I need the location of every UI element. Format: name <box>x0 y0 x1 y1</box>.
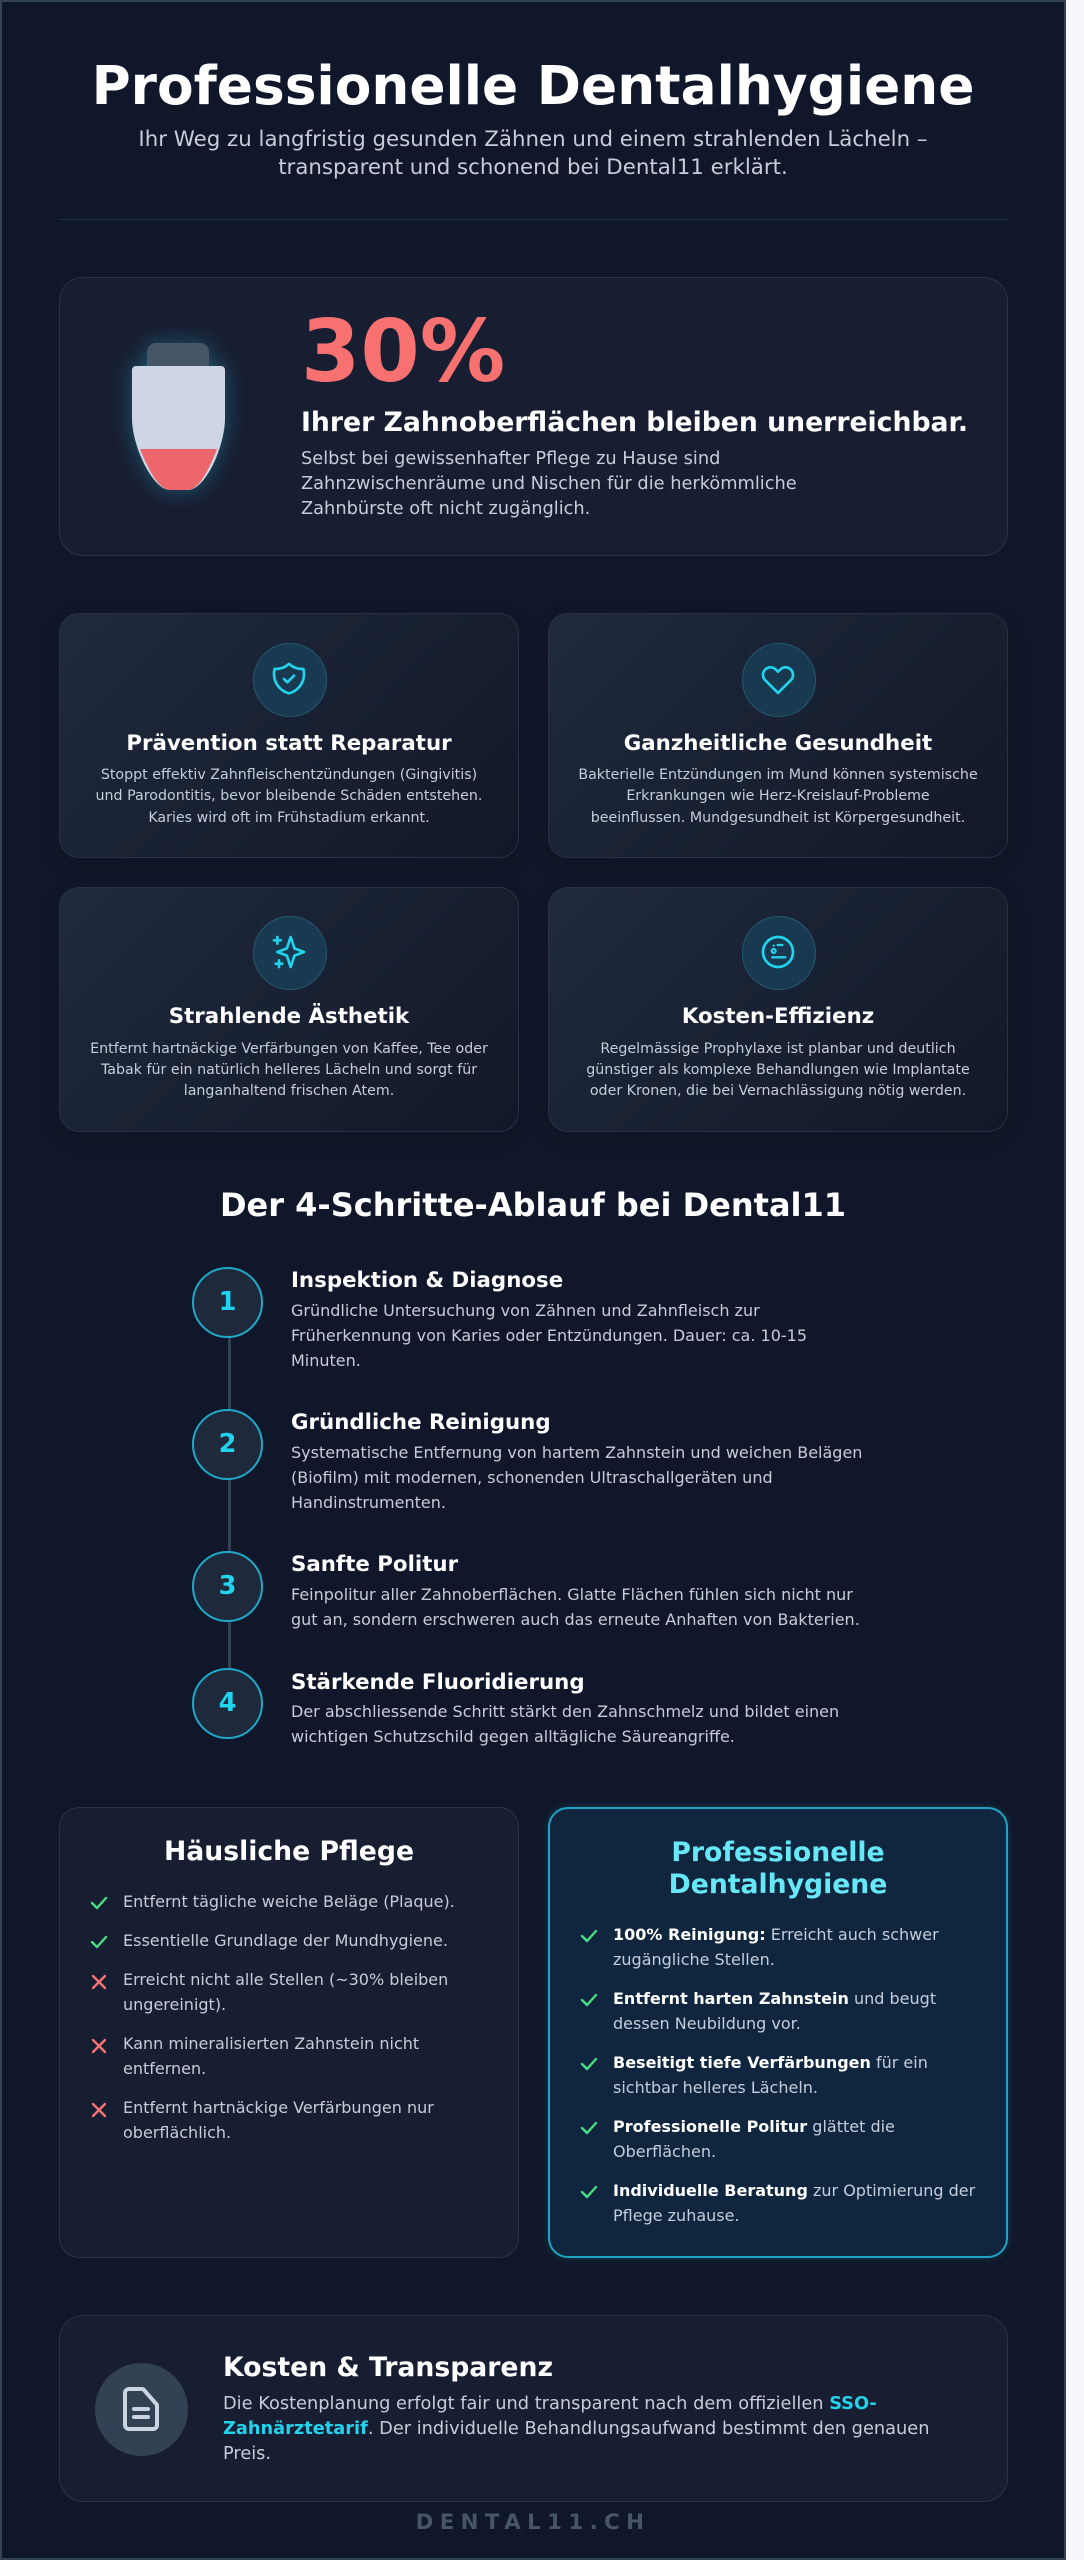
panel: Häusliche Pflege <box>59 1807 519 2258</box>
step text <box>291 1702 839 1746</box>
step number <box>192 1409 263 1480</box>
statistic description: Zahnbürste oft nicht zugänglich. <box>301 498 590 519</box>
card text: und Parodontitis, bevor bleibende Schäden entstehen. <box>96 788 482 804</box>
check item: Oberflächen. <box>613 2142 716 2161</box>
panel: Strahlende Ästhetik <box>59 887 519 1132</box>
step heading: Inspektion & Diagnose <box>291 1268 563 1293</box>
step 1 <box>192 1267 807 1370</box>
icon: document <box>95 2363 188 2456</box>
icon: sparkles <box>253 916 327 990</box>
card text: Entfernt hartnäckige Verfärbungen von Kaffee, Tee oder <box>90 1040 488 1056</box>
panel: Prävention statt Reparatur <box>59 613 519 858</box>
subtitle: Ihr Weg zu langfristig gesunden Zähnen und einem strahlenden Lächeln – <box>138 127 928 152</box>
cross item: ungereinigt). <box>123 1995 226 2014</box>
card text <box>96 767 482 826</box>
card text: günstiger als komplexe Behandlungen wie Implantate <box>586 1062 970 1078</box>
panel text: Preis. <box>223 2443 271 2464</box>
cross item <box>92 2034 419 2078</box>
check item: sichtbar helleres Lächeln. <box>613 2078 818 2097</box>
step number: 2 <box>219 1429 236 1459</box>
step heading: Gründliche Reinigung <box>291 1410 551 1435</box>
panel heading: Dentalhygiene <box>669 1869 887 1900</box>
step text: Der abschliessende Schritt stärkt den Zahnschmelz und bildet einen <box>291 1702 839 1721</box>
check item: Pflege zuhause. <box>613 2206 740 2225</box>
card text: Stoppt effektiv Zahnfleischentzündungen (Gingivitis) <box>101 767 477 783</box>
card text: Erkrankungen wie Herz-Kreislauf-Probleme <box>626 788 930 804</box>
card heading: Prävention statt Reparatur <box>126 731 452 756</box>
panel heading <box>669 1837 887 1900</box>
step text <box>291 1301 807 1370</box>
step text: Feinpolitur aller Zahnoberflächen. Glatte Flächen fühlen sich nicht nur <box>291 1585 853 1604</box>
step heading: Stärkende Fluoridierung <box>291 1670 585 1695</box>
card text: Tabak für ein natürlich helleres Lächeln und sorgt für <box>101 1062 477 1078</box>
card text: Regelmässige Prophylaxe ist planbar und deutlich <box>600 1040 956 1056</box>
card text: Karies wird oft im Frühstadium erkannt. <box>148 810 430 826</box>
subtitle <box>138 127 928 180</box>
statistic headline: Ihrer Zahnoberflächen bleiben unerreichbar. <box>301 407 968 438</box>
step text: Handinstrumenten. <box>291 1493 446 1512</box>
panel text: Die Kostenplanung erfolgt fair und transparent nach dem offiziellen SSO- <box>223 2393 877 2414</box>
step text: Früherkennung von Karies oder Entzündungen. Dauer: ca. 10-15 <box>291 1326 807 1345</box>
step number: 1 <box>219 1287 236 1317</box>
step 4 <box>192 1668 839 1746</box>
statistic description: Zahnzwischenräume und Nischen für die herkömmliche <box>301 473 797 494</box>
card heading: Ganzheitliche Gesundheit <box>624 731 932 756</box>
panel: Professionelle Dentalhygiene <box>548 1807 1008 2258</box>
card text <box>578 767 978 826</box>
card heading: Strahlende Ästhetik <box>169 1004 409 1029</box>
cross item: entfernen. <box>123 2059 206 2078</box>
check item: 100% Reinigung: Erreicht auch schwer <box>613 1925 939 1944</box>
panel heading: Professionelle <box>671 1837 885 1868</box>
cross item: Entfernt hartnäckige Verfärbungen nur <box>123 2098 434 2117</box>
title: Professionelle Dentalhygiene <box>92 54 974 117</box>
card text <box>586 1040 970 1099</box>
panel text: Zahnärztetarif. Der individuelle Behandlungsaufwand bestimmt den genauen <box>223 2418 929 2439</box>
big percentage: 30% <box>301 303 505 402</box>
step heading: Sanfte Politur <box>291 1552 458 1577</box>
step text: gut an, sondern erschweren auch das erneute Anhaften von Bakterien. <box>291 1610 860 1629</box>
check item: Entfernt harten Zahnstein und beugt <box>613 1989 936 2008</box>
panel text <box>223 2393 929 2464</box>
step number <box>192 1551 263 1622</box>
panel heading: Kosten & Transparenz <box>223 2352 553 2383</box>
check item <box>580 1989 936 2033</box>
check item: Professionelle Politur glättet die <box>613 2117 895 2136</box>
check item <box>580 2053 928 2097</box>
step number <box>192 1267 263 1338</box>
panel: Kosten & Transparenz <box>59 2315 1008 2502</box>
cross item <box>92 1970 448 2014</box>
check item: dessen Neubildung vor. <box>613 2014 801 2033</box>
check item <box>580 1925 939 1969</box>
icon: heart <box>742 643 816 717</box>
cross item <box>92 2098 434 2142</box>
step number: 4 <box>219 1688 236 1718</box>
panel: Ganzheitliche Gesundheit <box>548 613 1008 858</box>
subtitle: transparent und schonend bei Dental11 erklärt. <box>278 155 788 180</box>
step text: (Biofilm) mit modernen, schonenden Ultraschallgeräten und <box>291 1468 773 1487</box>
check item: zugängliche Stellen. <box>613 1950 775 1969</box>
step text: Systematische Entfernung von hartem Zahnstein und weichen Belägen <box>291 1443 862 1462</box>
card text: Bakterielle Entzündungen im Mund können systemische <box>578 767 978 783</box>
icon: tooth with unreachable area <box>122 333 235 500</box>
step 2 <box>192 1409 862 1512</box>
cross item: Kann mineralisierten Zahnstein nicht <box>123 2034 419 2053</box>
heading: process: Der 4-Schritte-Ablauf bei Dental11 <box>220 1186 846 1224</box>
cross item: oberflächlich. <box>123 2123 231 2142</box>
step text: Gründliche Untersuchung von Zähnen und Zahnfleisch zur <box>291 1301 760 1320</box>
statistic description: Selbst bei gewissenhafter Pflege zu Hause sind <box>301 448 720 469</box>
step number <box>192 1668 263 1739</box>
panel heading: Häusliche Pflege <box>164 1836 414 1867</box>
step text: wichtigen Schutzschild gegen alltägliche Säureangriffe. <box>291 1727 735 1746</box>
card heading: Kosten-Effizienz <box>682 1004 874 1029</box>
check item <box>580 2117 895 2161</box>
panel: Kosten-Effizienz <box>548 887 1008 1132</box>
step number: 3 <box>219 1571 236 1601</box>
step text: Minuten. <box>291 1351 361 1370</box>
card text: beeinflussen. Mundgesundheit ist Körpergesundheit. <box>591 810 965 826</box>
icon: shield <box>253 643 327 717</box>
check item <box>580 2181 976 2225</box>
step text <box>291 1443 862 1512</box>
cross item: Erreicht nicht alle Stellen (~30% bleiben <box>123 1970 448 1989</box>
check item: Beseitigt tiefe Verfärbungen für ein <box>613 2053 928 2072</box>
check item: Entfernt tägliche weiche Beläge (Plaque). <box>123 1892 455 1911</box>
card text: oder Kronen, die bei Vernachlässigung nötig werden. <box>590 1083 966 1099</box>
check item: Essentielle Grundlage der Mundhygiene. <box>123 1931 448 1950</box>
card text: langanhaltend frischen Atem. <box>184 1083 394 1099</box>
step 3 <box>192 1551 860 1629</box>
process timeline <box>192 1267 862 1746</box>
check item: Individuelle Beratung zur Optimierung der <box>613 2181 975 2200</box>
card text <box>90 1040 488 1099</box>
panel: 30% statistic <box>59 277 1008 556</box>
icon: coin <box>742 916 816 990</box>
step text <box>291 1585 860 1629</box>
statistic description <box>301 448 797 519</box>
footer brand: DENTAL11.CH <box>416 2510 650 2535</box>
